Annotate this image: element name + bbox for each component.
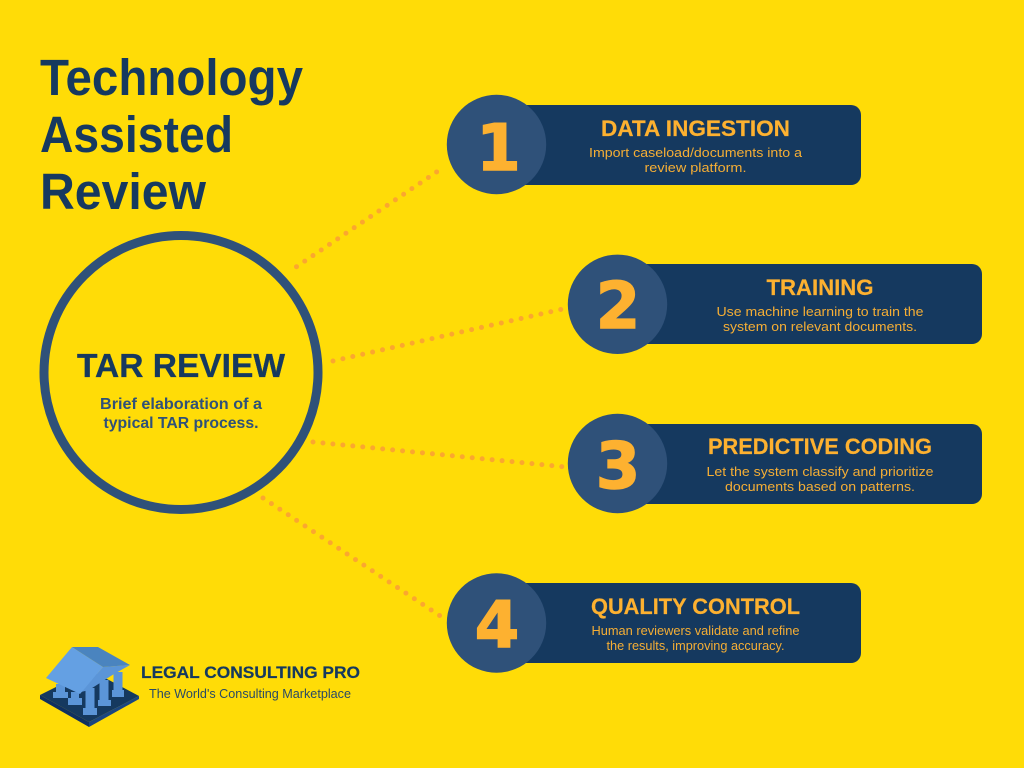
title: Assisted [40, 106, 233, 163]
logo name: LEGAL CONSULTING PRO [141, 664, 360, 682]
step 2: training: 2 [596, 270, 640, 344]
title: Technology [40, 49, 304, 106]
central description: typical TAR process. [104, 415, 258, 432]
step 4: quality control: 4 [475, 589, 519, 663]
step 3: predictive coding: Let the system classify and prioritize [706, 464, 934, 479]
dotted connector 3 [313, 442, 564, 467]
dotted connector 2 [333, 309, 563, 361]
step 1: data ingestion: DATA INGESTION [601, 116, 790, 141]
step 4: quality control: the results, improving accuracy. [606, 638, 784, 653]
step 2: training [568, 255, 982, 354]
step 3: predictive coding: PREDICTIVE CODING [708, 434, 932, 459]
central heading: TAR REVIEW [77, 347, 286, 384]
step 2: training: Use machine learning to train the [716, 304, 924, 319]
step 1: data ingestion [447, 95, 861, 194]
step 4: quality control: QUALITY CONTROL [591, 594, 800, 619]
step 3: predictive coding [568, 414, 982, 513]
step 4: quality control: Human reviewers validate and refine [592, 623, 800, 638]
icon: classical building [40, 647, 139, 727]
step 1: data ingestion: Import caseload/documents into a [589, 145, 803, 160]
central circle: TAR review [44, 236, 318, 510]
step 4: quality control [447, 573, 861, 673]
step 2: training: system on relevant documents. [723, 319, 917, 334]
title [40, 49, 304, 220]
central description: Brief elaboration of a [100, 396, 262, 413]
step 3: predictive coding: documents based on patterns. [725, 479, 915, 494]
step 1: data ingestion: 1 [476, 112, 521, 186]
step 2: training: TRAINING [766, 275, 874, 300]
logo: Legal Consulting Pro [40, 647, 360, 727]
step 1: data ingestion: review platform. [644, 160, 746, 175]
step 3: predictive coding: 3 [596, 430, 640, 504]
title: Review [40, 163, 206, 220]
logo tagline: The World's Consulting Marketplace [149, 687, 351, 701]
dotted connector 4 [263, 498, 441, 616]
central description [100, 396, 262, 432]
dotted connector 1 [296, 171, 438, 267]
